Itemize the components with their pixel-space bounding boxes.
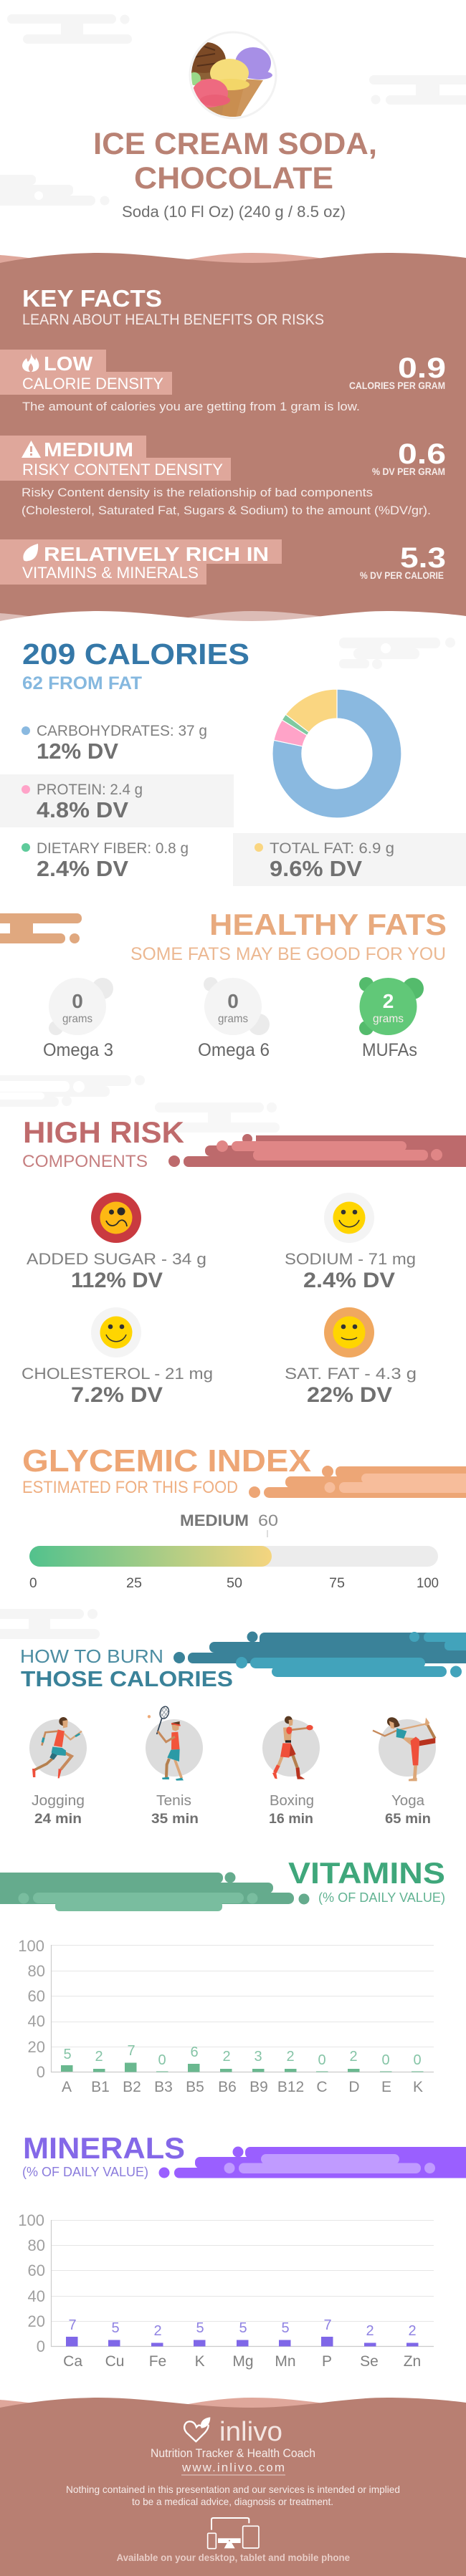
panel: healthy fats: [0, 908, 447, 1060]
legend: carbohydrates: CARBOHYDRATES: 37 g: [37, 723, 207, 739]
bar chart: minerals: K: [195, 2353, 205, 2370]
bar chart: minerals: 100: [18, 2211, 44, 2229]
legend: total fat: TOTAL FAT: 6.9 g: [270, 840, 394, 857]
panel background with waves: [0, 253, 466, 634]
panel: minerals: [18, 2131, 466, 2370]
donut chart: [272, 689, 401, 818]
panel: glycemic index: [22, 1443, 466, 1591]
icon: flame: [22, 353, 39, 372]
legend: total fat: 9.6% DV: [270, 856, 362, 881]
omega 6: [198, 977, 270, 1060]
activity: tennis: [146, 1706, 203, 1827]
unit: % DV PER CALORIE: [360, 570, 444, 581]
bar chart: vitamins: 2: [222, 2049, 231, 2065]
activity: boxing: 16 min: [269, 1812, 313, 1827]
bar chart: vitamins: 7: [127, 2043, 135, 2059]
bar chart: minerals: 5: [196, 2320, 204, 2336]
bar chart: minerals: Zn: [404, 2353, 421, 2370]
bar chart: vitamins: 5: [63, 2047, 72, 2062]
activity: yoga: Yoga: [391, 1793, 425, 1809]
icon: boxer: [272, 1716, 313, 1779]
subheading: LEARN ABOUT HEALTH BENEFITS OR RISKS: [22, 312, 324, 328]
value: 0.9: [398, 352, 446, 384]
heading: GLYCEMIC INDEX: [22, 1443, 311, 1479]
gauge rating: [180, 1512, 278, 1537]
heading: 209 CALORIES: [22, 638, 249, 671]
gauge scale: 100: [417, 1576, 439, 1591]
mufas: grams: [373, 1013, 404, 1025]
bar chart: minerals: Ca: [63, 2353, 82, 2370]
bar chart: vitamins: 0: [37, 2063, 45, 2081]
gauge scale: 75: [329, 1576, 345, 1591]
description: (Cholesterol, Saturated Fat, Sugars & Sodium) to the amount (%DV/gr).: [22, 504, 431, 517]
component: added sugar: [27, 1193, 206, 1292]
bar chart: vitamins: K: [413, 2079, 423, 2095]
legend: protein: 4.8% DV: [37, 797, 128, 822]
icon: devices: [208, 2518, 259, 2549]
decorative cloud: [0, 1873, 310, 1911]
label: CALORIE DENSITY: [22, 375, 163, 393]
activity: yoga: 65 min: [385, 1812, 431, 1827]
legend: dietary fiber: DIETARY FIBER: 0.8 g: [37, 840, 189, 857]
description: The amount of calories you are getting from 1 gram is low.: [22, 400, 360, 413]
decorative cloud: [249, 1466, 466, 1498]
legend: protein: [0, 774, 234, 827]
subheading: (% OF DAILY VALUE): [318, 1890, 445, 1905]
component: sodium: SODIUM - 71 mg: [285, 1250, 416, 1268]
gauge bar: [29, 1546, 438, 1567]
gauge scale: 0: [29, 1576, 37, 1591]
gauge scale: [29, 1576, 439, 1591]
decorative cloud: [0, 913, 82, 943]
activity: boxing: Boxing: [270, 1793, 314, 1809]
activity: tennis: 35 min: [151, 1812, 199, 1827]
value: 0.6: [398, 438, 446, 470]
bar chart: vitamins: 40: [28, 2012, 45, 2030]
panel: key facts: [0, 253, 466, 634]
mufas: [359, 977, 424, 1060]
rating: MEDIUM: [44, 438, 133, 461]
gauge scale: 50: [227, 1576, 242, 1591]
logo: inlivo: [219, 2417, 282, 2447]
footer background with waves: [0, 2398, 466, 2576]
title: [93, 127, 377, 196]
bar chart: minerals: 20: [28, 2312, 45, 2330]
heading: KEY FACTS: [22, 285, 162, 312]
disclaimer: to be a medical advice, diagnosis or treatment.: [132, 2496, 333, 2507]
bar chart: vitamins: B1: [91, 2079, 110, 2095]
bar chart: vitamins: 20: [28, 2038, 45, 2056]
rating: LOW: [44, 352, 93, 375]
heading: THOSE CALORIES: [21, 1666, 233, 1691]
disclaimer: [66, 2484, 400, 2507]
legend: carbohydrates: 12% DV: [37, 739, 118, 764]
decorative cloud: [339, 638, 455, 669]
disclaimer: Nothing contained in this presentation and our services is intended or implied: [66, 2484, 400, 2495]
legend: protein: PROTEIN: 2.4 g: [37, 782, 143, 798]
decorative cloud top right: [369, 75, 466, 105]
decorative cloud mid centre: [155, 1102, 280, 1133]
bar chart: minerals: 5: [111, 2320, 120, 2336]
bar chart: vitamins: 0: [381, 2052, 390, 2068]
food image: ice cream cones: [187, 32, 276, 120]
decorative cloud: [168, 1134, 466, 1167]
unit: CALORIES PER GRAM: [349, 380, 445, 391]
bar chart: minerals: 2: [408, 2323, 417, 2339]
bar chart: vitamins: B5: [186, 2079, 204, 2095]
label: RISKY CONTENT DENSITY: [22, 461, 223, 479]
decorative cloud: [173, 1632, 466, 1678]
component: added sugar: 112% DV: [71, 1269, 163, 1292]
activity: tennis: Tenis: [156, 1793, 191, 1809]
icon: neutral smile face: [324, 1307, 374, 1357]
bar chart: minerals: 7: [323, 2317, 332, 2333]
bar chart: vitamins: 2: [95, 2049, 103, 2065]
label: VITAMINS & MINERALS: [22, 564, 199, 582]
bar chart: minerals: 5: [239, 2320, 247, 2336]
bar chart: vitamins: E: [381, 2079, 391, 2095]
subheading: COMPONENTS: [22, 1152, 148, 1171]
activity: jogging: Jogging: [32, 1793, 85, 1809]
bar chart: minerals: Se: [360, 2353, 379, 2370]
panel: how to burn those calories: [20, 1632, 466, 1827]
heading: MINERALS: [23, 2131, 185, 2165]
omega 3: [43, 978, 113, 1060]
mufas: 2: [383, 990, 394, 1012]
bar chart: minerals: 0: [37, 2337, 45, 2355]
heading: VITAMINS: [288, 1856, 445, 1890]
omega 6: Omega 6: [198, 1040, 270, 1060]
component: sodium: 2.4% DV: [303, 1269, 395, 1292]
omega 3: 0: [72, 990, 83, 1012]
bar chart: vitamins: B9: [249, 2079, 268, 2095]
label boxes: [0, 539, 282, 585]
bar chart: vitamins: B6: [218, 2079, 237, 2095]
icon: warning triangle: [22, 441, 41, 458]
subheading: (% OF DAILY VALUE): [22, 2165, 148, 2179]
bar chart: minerals: 40: [28, 2287, 45, 2305]
title: CHOCOLATE: [134, 161, 333, 196]
tagline: Nutrition Tracker & Health Coach: [151, 2446, 315, 2460]
icon: happy face: [91, 1307, 141, 1357]
bar chart: vitamins: 2: [286, 2049, 295, 2065]
description: Risky Content density is the relationship of bad components: [22, 486, 373, 499]
decorative cloud lower left: [0, 1609, 100, 1639]
bar chart: minerals: Cu: [105, 2353, 124, 2370]
bar chart: vitamins: 0: [413, 2052, 422, 2068]
bar chart: vitamins: 2: [349, 2049, 358, 2065]
panel: vitamins: [0, 1856, 445, 2095]
decorative cloud top left: [7, 14, 132, 44]
component: saturated fat: SAT. FAT - 4.3 g: [285, 1365, 417, 1383]
bar chart: vitamins: 0: [158, 2052, 166, 2068]
legend: total fat: [233, 833, 466, 886]
bar chart: vitamins: [18, 1937, 434, 2095]
logo: [184, 2417, 282, 2447]
gauge scale: 25: [126, 1576, 142, 1591]
activity: yoga: [373, 1717, 436, 1827]
unit: % DV PER GRAM: [372, 466, 445, 477]
serving size subtitle: Soda (10 Fl Oz) (240 g / 8.5 oz): [122, 203, 346, 221]
component: cholesterol: 7.2% DV: [71, 1383, 163, 1407]
bar chart: minerals: 60: [28, 2262, 45, 2279]
icon: yoga pose: [373, 1717, 435, 1781]
icon: runner: [32, 1717, 82, 1778]
panel: high risk components: [22, 1115, 466, 1407]
website link: www.inlivo.com: [181, 2461, 285, 2474]
icon: sad face: [91, 1193, 141, 1243]
label boxes: [0, 436, 231, 481]
component: saturated fat: 22% DV: [307, 1383, 392, 1407]
bar chart: minerals: P: [322, 2353, 332, 2370]
legend: dietary fiber: [22, 840, 189, 881]
bar chart: minerals: 5: [281, 2320, 290, 2336]
activity: boxing: [262, 1716, 320, 1827]
subheading: 62 FROM FAT: [22, 673, 142, 693]
subheading: ESTIMATED FOR THIS FOOD: [22, 1478, 238, 1497]
omega 6: 0: [227, 990, 239, 1012]
icon: heart and leaf: [184, 2417, 210, 2441]
decorative cloud: [159, 2146, 466, 2178]
rating: RELATIVELY RICH IN: [44, 543, 269, 565]
legend: carbohydrates: [22, 723, 207, 764]
heading: HIGH RISK: [23, 1115, 184, 1149]
component: saturated fat: [285, 1307, 417, 1407]
bar chart: minerals: Mn: [275, 2353, 296, 2370]
bar chart: minerals: Fe: [149, 2353, 166, 2370]
icon: tennis player: [148, 1706, 184, 1781]
fact: calorie density: [0, 350, 446, 413]
omega 3: Omega 3: [43, 1040, 113, 1060]
bar chart: vitamins: 60: [28, 1987, 45, 2005]
bar chart: vitamins: B2: [123, 2079, 141, 2095]
bar chart: minerals: 80: [28, 2236, 45, 2254]
gauge rating: MEDIUM: [180, 1512, 249, 1529]
gauge rating: 60: [258, 1512, 278, 1529]
bar chart: minerals: 2: [153, 2323, 162, 2339]
label boxes: [0, 350, 172, 395]
bar chart: vitamins: D: [348, 2079, 360, 2095]
component: added sugar: ADDED SUGAR - 34 g: [27, 1250, 206, 1268]
icon: happy face: [324, 1193, 374, 1243]
panel: calories: [0, 638, 466, 886]
bar chart: vitamins: 100: [18, 1937, 44, 1955]
bar chart: vitamins: A: [62, 2079, 72, 2095]
title: ICE CREAM SODA,: [93, 127, 377, 161]
fact: risky content density: [0, 436, 446, 517]
heading: HOW TO BURN: [20, 1645, 163, 1667]
decorative cloud left: [0, 175, 109, 206]
bar chart: vitamins: 3: [254, 2049, 262, 2065]
decorative cloud mid left: [0, 1075, 145, 1107]
activity: jogging: [29, 1717, 87, 1827]
value: 5.3: [400, 542, 446, 574]
bar chart: vitamins: C: [316, 2079, 328, 2095]
bar chart: minerals: 2: [366, 2323, 374, 2339]
bar chart: minerals: [18, 2211, 434, 2370]
bar chart: vitamins: 0: [318, 2052, 326, 2068]
bar chart: vitamins: 6: [190, 2044, 199, 2060]
component: cholesterol: CHOLESTEROL - 21 mg: [22, 1365, 213, 1383]
activity: jogging: 24 min: [34, 1812, 82, 1827]
panel: footer: [0, 2398, 466, 2576]
icon: leaf: [23, 544, 38, 561]
bar chart: vitamins: B12: [277, 2079, 304, 2095]
heading: HEALTHY FATS: [209, 908, 447, 941]
omega 6: grams: [218, 1013, 248, 1025]
description: [22, 486, 431, 517]
component: sodium: [285, 1193, 416, 1292]
bar chart: vitamins: 80: [28, 1962, 45, 1980]
bar chart: vitamins: B3: [154, 2079, 173, 2095]
availability note: Available on your desktop, tablet and mobile phone: [116, 2552, 350, 2563]
omega 3: grams: [62, 1013, 92, 1025]
subheading: SOME FATS MAY BE GOOD FOR YOU: [130, 944, 446, 964]
legend: dietary fiber: 2.4% DV: [37, 856, 128, 881]
heading: [20, 1645, 233, 1691]
mufas: MUFAs: [362, 1040, 417, 1060]
bar chart: minerals: 7: [68, 2317, 77, 2333]
component: cholesterol: [22, 1307, 213, 1407]
bar chart: minerals: Mg: [232, 2353, 254, 2370]
fact: vitamins and minerals: [0, 539, 446, 585]
